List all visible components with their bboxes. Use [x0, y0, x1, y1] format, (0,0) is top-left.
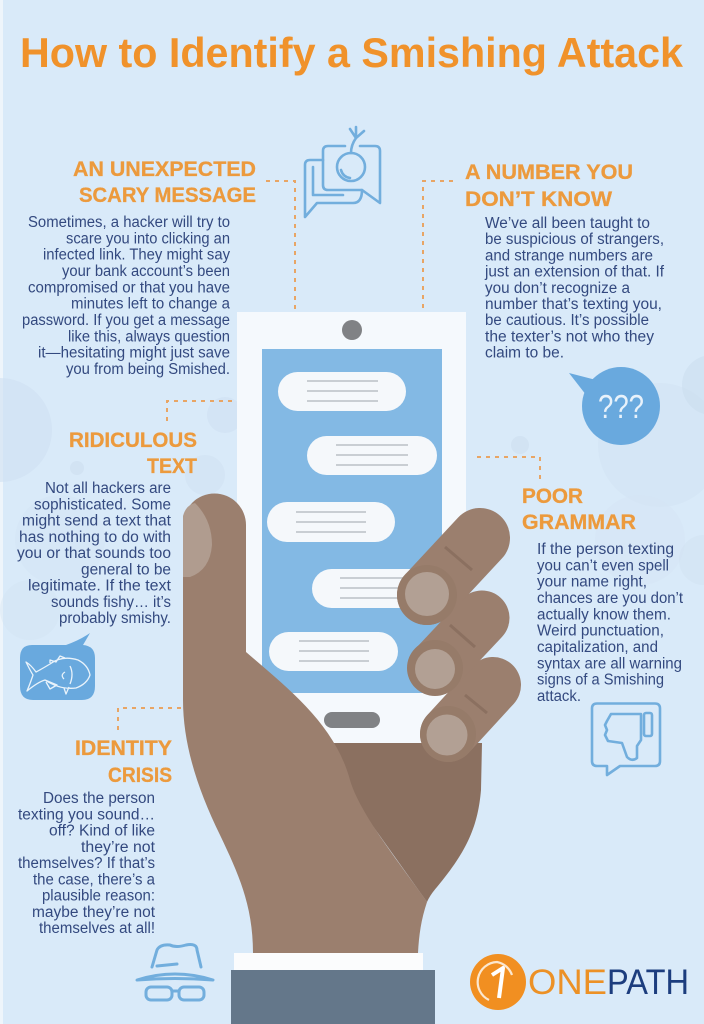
- body text: themselves? If that’s: [18, 855, 155, 872]
- body text: password. If you get a message: [22, 312, 230, 329]
- body text: Weird punctuation,: [537, 623, 664, 640]
- logo: Onepath: [470, 954, 689, 1010]
- body text: the texter’s not who they: [485, 328, 654, 345]
- body text: Does the person: [43, 790, 155, 807]
- icon: question mark speech bubble: ???: [598, 388, 644, 425]
- heading: TEXT: [147, 454, 197, 478]
- body text: the case, there’s a: [33, 871, 155, 888]
- body text: If the person texting: [537, 541, 674, 558]
- body text: sophisticated. Some: [34, 496, 171, 513]
- panel: a number you don't know: [465, 160, 665, 362]
- thumb and wrist: [183, 494, 427, 953]
- logo mark: [470, 954, 526, 1010]
- index finger: [397, 538, 480, 625]
- body text: you or that sounds too: [17, 545, 171, 562]
- message bubble 3: [267, 502, 395, 542]
- icon: question mark speech bubble: [569, 367, 660, 445]
- ring finger: [420, 685, 493, 762]
- body text: [484, 215, 665, 362]
- phone: [237, 312, 466, 743]
- message bubble 2: [307, 436, 437, 475]
- heading: [69, 428, 197, 478]
- body text: claim to be.: [485, 345, 564, 362]
- connector: identity crisis: [118, 708, 181, 730]
- heading: [465, 160, 633, 211]
- body text: you can’t even spell: [537, 557, 669, 574]
- middle finger: [407, 618, 482, 696]
- body text: minutes left to change a: [71, 296, 230, 313]
- screen: [262, 349, 442, 693]
- body text: your bank account’s been: [62, 263, 230, 280]
- body text: it—hesitating might just save: [38, 345, 230, 362]
- body text: general to be: [81, 561, 171, 578]
- title: How to Identify a Smishing Attack: [20, 29, 684, 76]
- heading: GRAMMAR: [522, 510, 636, 534]
- heading: IDENTITY: [75, 736, 172, 760]
- body text: you don’t recognize a: [485, 280, 630, 297]
- body text: infected link. They might say: [43, 247, 230, 264]
- heading: [73, 157, 256, 207]
- body text: [537, 541, 684, 705]
- body text: sounds fishy… it’s: [51, 594, 171, 611]
- body text: off? Kind of like: [49, 822, 155, 840]
- body text: might send a text that: [22, 512, 172, 530]
- connector: poor grammar: [477, 457, 540, 480]
- connector: ridiculous text: [167, 401, 232, 423]
- heading: AN UNEXPECTED: [73, 157, 256, 181]
- heading: [75, 736, 172, 787]
- heading: CRISIS: [108, 763, 172, 787]
- body text: attack.: [537, 688, 581, 705]
- message bubble 5: [269, 632, 398, 671]
- body text: you from being Smished.: [66, 361, 230, 378]
- panel: ridiculous text: [17, 428, 197, 627]
- panel: poor grammar: [522, 484, 684, 705]
- suit sleeve: [231, 970, 435, 1024]
- body text: like this, always question: [68, 328, 230, 345]
- shirt cuff: [234, 953, 423, 971]
- phone body: [237, 312, 466, 743]
- hand: [183, 494, 493, 953]
- body text: scare you into clicking an: [66, 230, 230, 247]
- body text: plausible reason:: [42, 888, 155, 904]
- body text: just an extension of that. If: [484, 264, 665, 281]
- heading: [522, 484, 636, 534]
- thumbnail: [183, 503, 212, 577]
- body text: compromised or that you have: [28, 279, 230, 296]
- body text: they’re not: [81, 839, 156, 856]
- heading: DON’T KNOW: [465, 187, 613, 211]
- message bubble 1: [278, 372, 406, 411]
- connector: unknown number: [423, 181, 453, 310]
- body text: Sometimes, a hacker will try to: [28, 214, 230, 231]
- heading: A NUMBER YOU: [465, 160, 633, 184]
- body text: signs of a Smishing: [537, 672, 664, 689]
- logo wordmark: [528, 963, 689, 1002]
- body text: legitimate. If the text: [28, 578, 172, 594]
- message bubble 4: [312, 569, 440, 608]
- icon: bomb message: [305, 127, 380, 217]
- logo wordmark: ONE: [528, 963, 607, 1002]
- body text: your name right,: [537, 574, 647, 591]
- heading: SCARY MESSAGE: [79, 183, 256, 207]
- logo wordmark: PATH: [607, 963, 689, 1002]
- body text: [22, 214, 230, 378]
- palm shadow: [325, 743, 482, 902]
- camera: [342, 320, 362, 340]
- icon: spy hat and glasses: [137, 945, 213, 1000]
- heading: RIDICULOUS: [69, 428, 197, 452]
- body text: number that’s texting you,: [485, 296, 662, 313]
- panel: identity crisis: [18, 736, 172, 937]
- body text: themselves at all!: [39, 920, 155, 937]
- icon: fish speech bubble: [20, 633, 95, 700]
- heading: POOR: [522, 484, 583, 508]
- body text: has nothing to do with: [19, 529, 171, 546]
- panel: an unexpected scary message: [22, 157, 256, 378]
- body text: Not all hackers are: [45, 480, 171, 497]
- body text: be cautious. It’s possible: [485, 312, 649, 329]
- body text: [17, 480, 172, 627]
- body text: We’ve all been taught to: [485, 215, 650, 232]
- body text: be suspicious of strangers,: [485, 231, 664, 248]
- connector: scary message: [266, 181, 295, 310]
- body text: probably smishy.: [59, 610, 171, 627]
- body text: actually know them.: [537, 606, 671, 623]
- body text: syntax are all warning: [537, 655, 682, 672]
- home button: [324, 712, 380, 728]
- body text: capitalization, and: [537, 639, 658, 656]
- body text: and strange numbers are: [485, 247, 653, 264]
- icon: thumbs down speech bubble: [592, 704, 660, 775]
- body text: chances are you don’t: [537, 590, 684, 607]
- body text: texting you sound…: [18, 806, 155, 823]
- body text: [18, 790, 156, 937]
- body text: maybe they’re not: [32, 904, 156, 921]
